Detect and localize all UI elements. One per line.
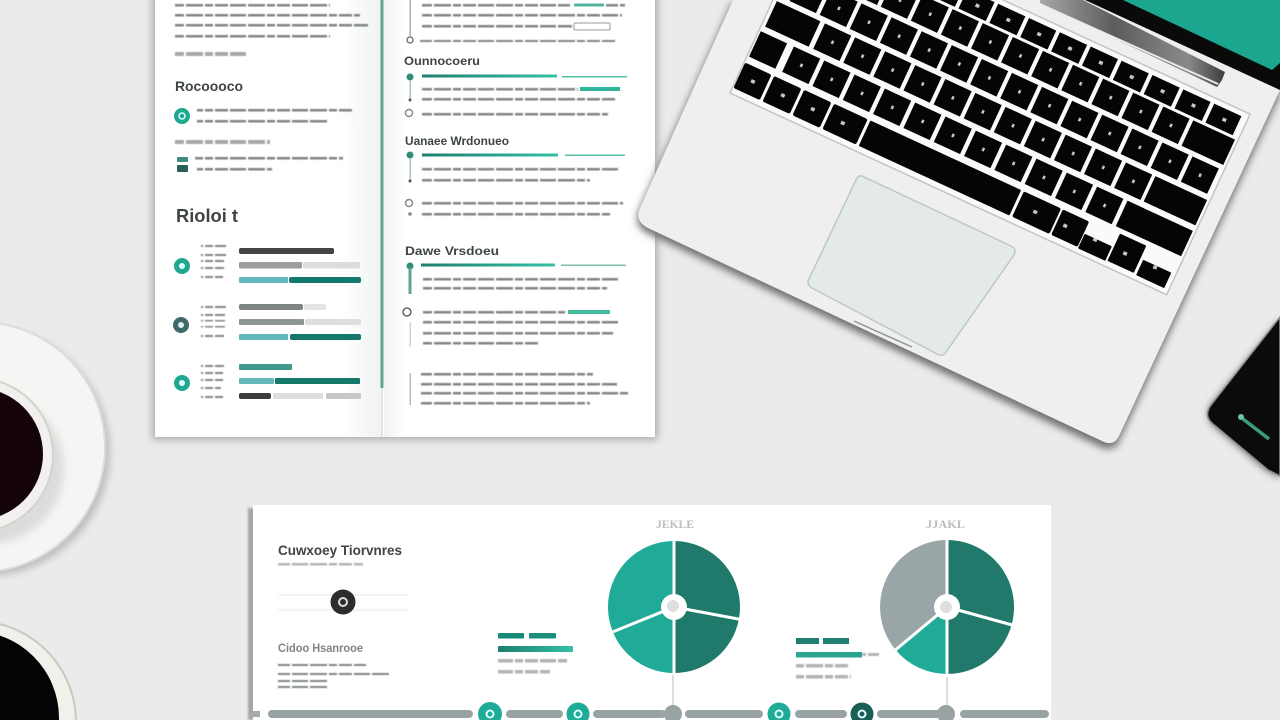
pie chart 1 heading: JEKLE [656, 519, 694, 531]
timeline node 3 [664, 705, 682, 720]
timeline node 6 [937, 705, 955, 720]
contact subheading and stacked icon [175, 140, 343, 172]
report body text [278, 664, 391, 688]
mini legend 1 [498, 633, 573, 674]
laptop screen edge [1085, 0, 1280, 90]
letter key rows [755, 0, 1241, 244]
pie chart 2 heading: JJAKL [926, 519, 965, 531]
keyboard [730, 0, 1250, 295]
resume page [152, 0, 658, 440]
hinge [1040, 0, 1225, 87]
report title: Cuwxoey Tiorvnres [278, 542, 402, 558]
second coffee cup [0, 621, 76, 720]
report subtitle [278, 563, 363, 566]
laptop [637, 0, 1280, 449]
contact item with teal icon [174, 108, 354, 124]
front notch [854, 321, 912, 347]
timeline node 4 [768, 702, 790, 720]
timeline node 2 [566, 702, 590, 720]
mini legend 2 [796, 638, 879, 678]
key legends [751, 0, 1233, 272]
skills group 3 [174, 364, 361, 399]
pie chart 2 [880, 538, 1014, 676]
heading: Dawe Vrsdoeu: Dawe Vrsdoeu [405, 246, 499, 258]
dark round icon with faded lines [278, 590, 408, 614]
pie chart 1 [608, 539, 741, 675]
heading: Rocoooco: Rocoooco [175, 78, 243, 94]
experience section 1 [404, 56, 627, 116]
experience section 4 [410, 373, 628, 405]
heading: Uanaee Wrdonueo: Uanaee Wrdonueo [405, 136, 509, 148]
heading: Riolot: Rioloi t [176, 206, 238, 226]
coffee cup and saucer [0, 322, 110, 576]
page fold line [380, 0, 384, 437]
timeline node 5 [850, 702, 874, 720]
phone [1207, 317, 1280, 478]
skills group 1 [174, 245, 361, 283]
timeline node 1 [478, 702, 502, 720]
skills group 2 [173, 304, 361, 340]
experience section 2 [405, 136, 625, 216]
report subheading: Cidoo Hsanrooe [278, 643, 363, 655]
report panel [248, 505, 1051, 720]
experience section 3 [403, 246, 626, 347]
resume left column: intro text [175, 4, 368, 56]
experience section 0 (cut off at top) [407, 0, 625, 43]
bottom key row with space bar [733, 61, 1177, 288]
heading: Ounnocoeru: Ounnocoeru [404, 56, 480, 68]
trackpad [808, 176, 1015, 355]
timeline [250, 675, 1049, 720]
phone screen label [1238, 414, 1269, 439]
